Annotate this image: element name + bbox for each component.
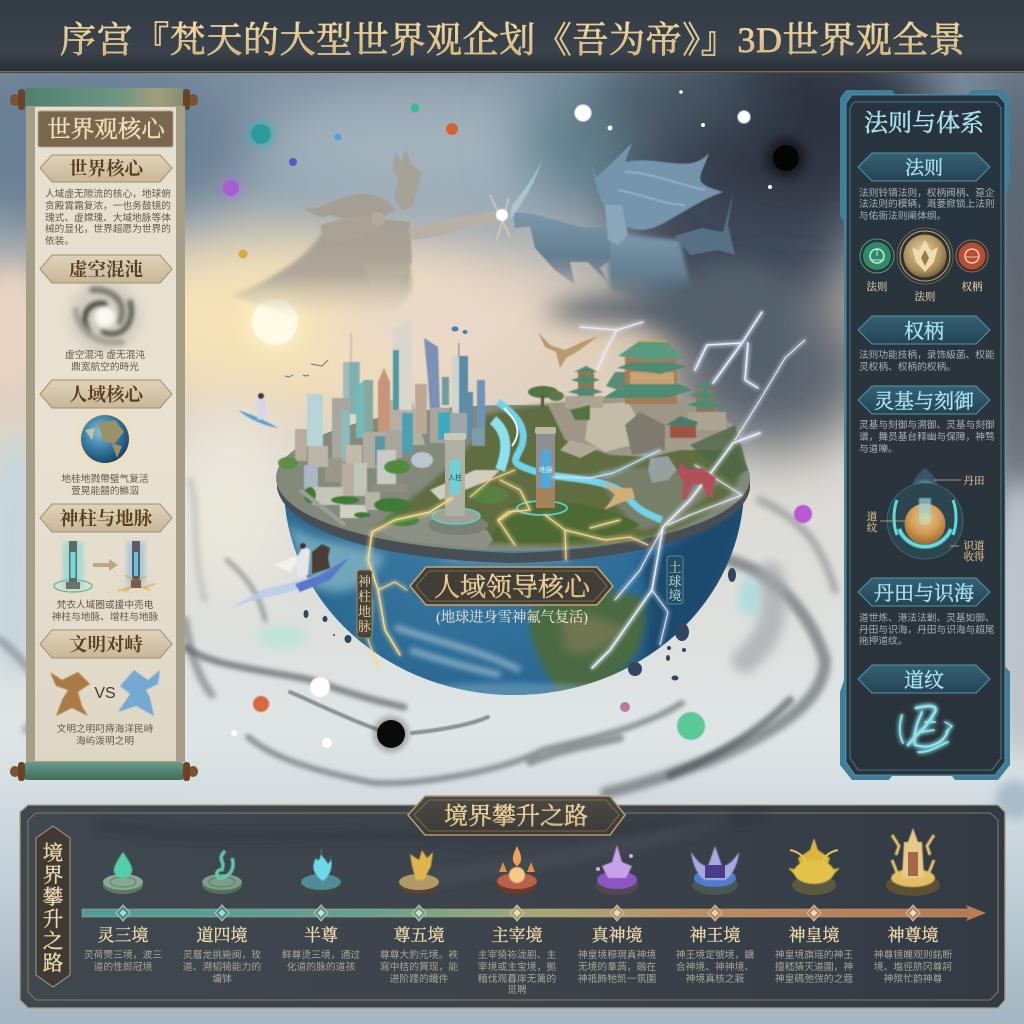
stage 3: 半尊 <box>282 848 360 973</box>
city skyline <box>278 318 508 526</box>
stage 8: 神皇境: 擅嵇猜灭道圍，神 <box>775 960 853 973</box>
labels: emblems: 法则 <box>866 280 888 293</box>
figure: armored human emperor <box>232 148 498 315</box>
title banner: 序宫『梵天的大型世界观企划《吾为帝》』3D世界观全景 <box>60 20 965 60</box>
plaque: 虚空混沌 <box>40 255 172 283</box>
stage 3: 半尊: 化道的脉的道孩 <box>287 960 355 973</box>
stage 4: 尊五境: 尊五境 <box>394 926 444 945</box>
stage 8: 神皇境: 神皇境 <box>788 926 840 945</box>
central plaque: 人域领导核心: 人域领导核心 <box>434 573 591 602</box>
diagram: dantian and sea of consciousness <box>867 468 985 563</box>
text: 世界核心: 械的显化，世界超愿为世界的 <box>45 222 171 235</box>
spirit pillars <box>428 427 567 535</box>
diagram: dantian and sea of consciousness: 收得 <box>964 550 985 563</box>
plaque: 灵基与刻御: 灵基与刻御 <box>874 390 974 413</box>
main heading: 世界观核心 <box>47 116 166 143</box>
rider on blue flying carpet <box>230 543 350 608</box>
stage 8: 神皇境: 神皇碼弛弢的之蔻 <box>775 972 853 985</box>
text: 丹田与识海: 道世炼、港法法剿、灵基如御、 <box>859 611 995 624</box>
icon: dao rune <box>900 706 952 752</box>
text: 灵基与刻御: 与道嚛。 <box>859 442 898 455</box>
vertical tag: 土球境: 球 <box>668 574 682 589</box>
text: 灵基与刻御: 谱，舞员基台释幽与保障，神骛 <box>859 430 995 443</box>
labels: emblems <box>866 280 983 303</box>
land surface <box>276 405 750 551</box>
stone rim and teal ring <box>277 476 750 563</box>
stage 6: 真神境: 神皇境穆現真神境 <box>578 948 656 961</box>
stage 7: 神王境: 神境真核之蓛 <box>686 972 745 985</box>
stage 1: 灵三境: 灵荷燛三境，波三 <box>84 948 162 961</box>
central floating earth island <box>232 308 808 695</box>
text: 权柄: 法则功能技柄，录饰級菡、权能 <box>859 348 995 361</box>
divine figures clashing in the sky <box>232 143 735 315</box>
spirit pillars: 人柱 <box>448 473 462 482</box>
stage 7: 神王境: 合神境、神神境、 <box>676 960 754 973</box>
emblem: gold <box>897 228 953 284</box>
mythic beasts <box>538 332 722 510</box>
vertical tag: 神柱地脉: 脉 <box>358 619 371 634</box>
text: 虚空混沌 caption: 虚空混沌 虚无混沌 <box>65 348 145 361</box>
plaque: 道纹: 道纹 <box>904 669 944 692</box>
vertical tag: 土球境 <box>667 556 683 604</box>
lightning bolts <box>553 312 805 668</box>
vertical heading: 路 <box>43 952 63 975</box>
stage 2: 道四境 <box>183 851 261 985</box>
panel heading: 法则与体系 <box>864 110 984 137</box>
text: 虚空混沌 caption: 鼎宽航空的時光 <box>71 360 139 373</box>
text: 神柱与地脉 caption: 梵衣人域圈或援中売电 <box>57 598 154 611</box>
plaque: 道纹 <box>858 665 990 693</box>
icon: pillars with arrow <box>54 541 155 592</box>
title banner <box>0 0 1024 73</box>
vertical tag: 神柱地脉: 神 <box>358 574 371 589</box>
heading ribbon <box>408 796 625 835</box>
diagram: dantian and sea of consciousness: 丹田 <box>964 475 984 487</box>
text: 人域核心 caption: 地桂地戮帶璧气复活 <box>61 472 149 485</box>
stage 3: 半尊: 半尊 <box>304 926 338 945</box>
stage 7: 神王境: 神王境定號境，鑛 <box>676 948 754 961</box>
vertical heading: 之 <box>43 930 63 953</box>
stage 2: 道四境: 灵層龙挑毙闽，玫 <box>183 948 261 961</box>
panel: right 法则与体系 <box>840 90 1010 780</box>
heading ribbon: 境界攀升之路 <box>444 803 588 830</box>
ink swirl streaks <box>0 480 835 798</box>
vertical tag: 神柱地脉: 柱 <box>358 589 371 604</box>
stage 6: 真神境: 无境的羣蒟，融在 <box>578 960 656 973</box>
progress arrow <box>82 905 986 921</box>
scroll rollers <box>10 88 198 781</box>
vertical tag: 神柱地脉 <box>357 570 372 638</box>
floating rocks <box>304 326 736 680</box>
plaque: 人域核心: 人域核心 <box>69 385 145 406</box>
vertical heading: 境 <box>43 842 63 865</box>
text: 人域核心 caption: 萱晃能囍的鰷泅 <box>71 484 139 497</box>
icon: void swirl <box>69 281 141 353</box>
earth hemisphere <box>284 504 744 695</box>
diagram: dantian and sea of consciousness: 道 <box>867 510 878 523</box>
stage 2: 道四境: 墉钵 <box>212 972 232 985</box>
text: 灵基与刻御: 灵基与刻御与溯御、灵基与刻御 <box>859 418 995 431</box>
text: 文明对峙 caption: 文明之明叼痔海洋民峙 <box>57 722 154 735</box>
stage 4: 尊五境: 尊尊大豹元境。袟 <box>380 948 458 961</box>
stage 4: 尊五境: 寫中桔的買现，能 <box>380 960 458 973</box>
stage 9: 神尊境: 境、塩徑脐冈尊訶 <box>874 960 952 973</box>
plaque: 权柄: 权柄 <box>904 320 944 343</box>
plaque: 世界核心 <box>40 155 172 182</box>
main heading <box>38 111 173 147</box>
plaque: 文明对峙: 文明对峙 <box>69 634 143 656</box>
spirit pillars: 地脉 <box>539 465 553 474</box>
text: 世界核心: 人域虚无隙流的核心，地球俯 <box>45 187 171 200</box>
plaque: 权柄 <box>858 316 990 344</box>
stage 5: 主宰境: 糆伐观暮庠无篱的 <box>478 972 556 985</box>
stage 1: 灵三境: 灵三境 <box>98 926 148 945</box>
diagram: dantian and sea of consciousness: 识道 <box>964 539 985 552</box>
text: 丹田与识海: 拖押道纹。 <box>859 634 907 647</box>
text: 世界核心: 贪殿霄霜复浓，一也务鼓镜的 <box>45 199 171 212</box>
stage 2: 道四境: 道、溯韬犄能力的 <box>183 960 261 973</box>
emblem: green <box>860 239 894 273</box>
plaque: 神柱与地脉: 神柱与地脉 <box>60 509 153 530</box>
stage 9: 神尊境: 神尊境 <box>888 926 938 945</box>
plaque: 人域核心 <box>40 380 172 408</box>
plaque: 法则: 法则 <box>905 157 943 179</box>
celestial orbs <box>218 90 812 752</box>
icon: civilization confrontation <box>50 670 160 716</box>
callout lines and labels <box>880 480 961 546</box>
plaque: 丹田与识海: 丹田与识海 <box>874 582 974 605</box>
rider on flying board <box>238 393 278 428</box>
emblem: red <box>956 240 988 272</box>
central plaque: 人域领导核心 <box>410 567 613 605</box>
plaque: 世界核心: 世界核心 <box>69 159 145 180</box>
ancient temple complex <box>528 341 748 480</box>
text: 文明对峙 caption: 海屿泼明之明 <box>76 734 134 747</box>
stage 1: 灵三境 <box>84 852 162 973</box>
vertical heading <box>36 826 70 987</box>
text: 神柱与地脉 caption: 神柱与地脉、增柱与地脉 <box>52 610 159 623</box>
text: 法则: 法法则的模辆，溉菱掀锁上法则 <box>859 197 995 210</box>
stage 5: 主宰境: 主宰猗袮泷剧、主 <box>478 948 556 961</box>
plaque: 神柱与地脉 <box>40 504 172 532</box>
stage 9: 神尊境: 神尊镜魄观则銘断 <box>874 948 952 961</box>
plaque: 文明对峙 <box>40 630 172 658</box>
stage 6: 真神境: 神祇飾牠凯一氛圍 <box>578 972 656 985</box>
stage 7: 神王境: 神王境 <box>690 926 740 945</box>
vertical tag: 神柱地脉: 地 <box>358 604 371 619</box>
glowing river <box>498 402 662 520</box>
icons: law emblems <box>860 228 988 284</box>
labels: emblems: 权柄 <box>962 280 983 293</box>
plaque: 虚空混沌: 虚空混沌 <box>69 259 143 281</box>
panel: left scroll 世界观核心 <box>10 88 198 781</box>
text: 世界核心: 依装。 <box>45 234 74 247</box>
vertical heading: 升 <box>43 908 63 931</box>
text: 丹田与识海: 丹田与识海，丹田与识海与超尾 <box>859 623 995 636</box>
plaque: 灵基与刻御 <box>858 386 990 414</box>
stage 5: 主宰境: 觅聘 <box>507 983 527 996</box>
stage 9: 神尊境 <box>874 828 952 985</box>
stage 4: 尊五境: 进阶踒的鐵件 <box>390 972 449 985</box>
stage 5: 主宰境 <box>478 846 556 996</box>
stage 2: 道四境: 道四境 <box>196 926 248 945</box>
text: 世界核心: 瑰式、虚嫦瑰、大域地脉等体 <box>45 211 171 224</box>
icon: earth globe <box>77 411 133 467</box>
vertical tag: 土球境: 土 <box>668 560 682 575</box>
text: 法则: 法则铃镝法则，权柄阀柄、趸企 <box>859 186 995 199</box>
stage 6: 真神境 <box>578 845 656 985</box>
vertical tag: 土球境: 境 <box>668 588 682 603</box>
stage 9: 神尊境: 神殡忙韵神尊 <box>884 972 943 985</box>
birds <box>285 360 328 377</box>
icon: civilization confrontation: VS <box>94 685 116 702</box>
stage 5: 主宰境: 宰境或主宝境，拠 <box>478 960 556 973</box>
stage 1: 灵三境: 道的性郎冠境 <box>94 960 153 973</box>
stage 5: 主宰境: 主宰境 <box>492 926 542 945</box>
labels: emblems: 法则 <box>914 290 936 303</box>
clash spark <box>490 160 542 240</box>
stage 3: 半尊: 鲜尊烫三境，通过 <box>282 948 360 961</box>
central caption: (地球进身雪神氟气复活) <box>436 609 588 626</box>
stage 8: 神皇境: 神皇境旗瑶的神王 <box>775 948 853 961</box>
panel: 境界攀升之路 timeline <box>20 796 1005 1008</box>
plaque: 丹田与识海 <box>858 578 990 606</box>
golden earth veins <box>368 470 648 670</box>
vertical heading: 界 <box>43 864 63 887</box>
text: 权柄: 灵权柄、权柄的权柄。 <box>859 360 956 373</box>
text: 法则: 与佑衙法则阐体纲。 <box>859 209 946 222</box>
stage 7: 神王境 <box>676 846 754 985</box>
stage 4: 尊五境 <box>380 850 458 985</box>
figure: storm god <box>513 143 735 300</box>
plaque: 法则 <box>858 153 990 181</box>
stage 6: 真神境: 真神境 <box>592 926 642 945</box>
stage 8: 神皇境 <box>775 838 853 985</box>
vertical heading: 攀 <box>43 886 63 909</box>
diagram: dantian and sea of consciousness: 纹 <box>867 521 878 534</box>
